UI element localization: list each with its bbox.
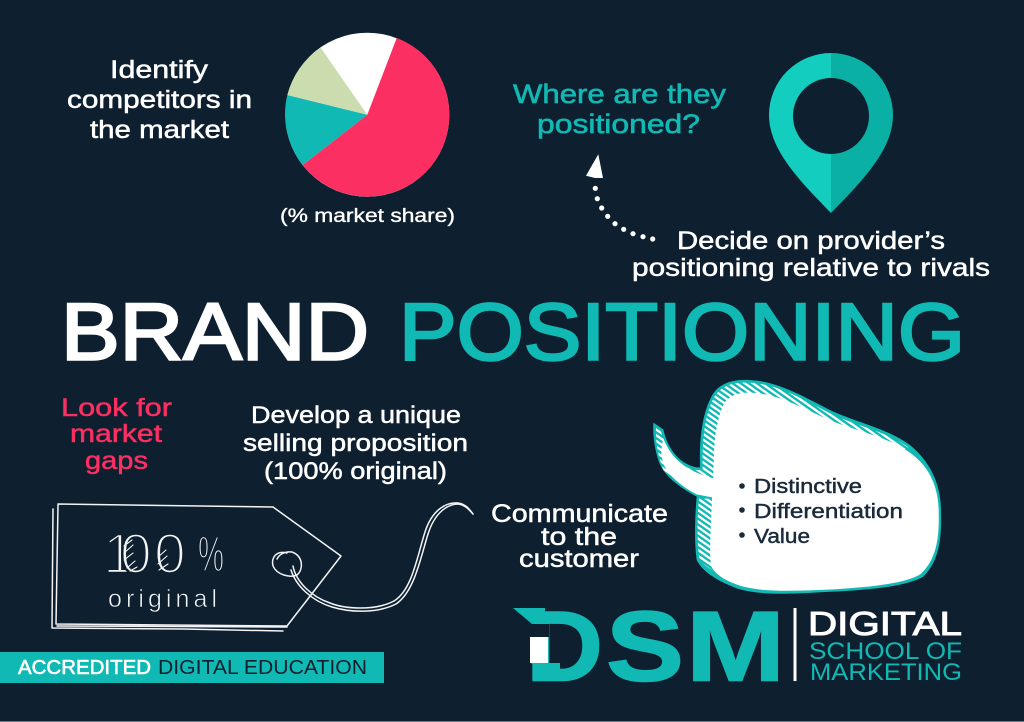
logo mark: DSM: D [526,590,603,702]
bubble list: Differentiation [754,501,903,523]
badge: accredited digital education: DIGITAL EDUCATION [158,657,367,679]
text: communicate to the customer: customer [519,545,639,573]
logo: digital school of marketing [513,590,962,702]
logo mark: DSM [513,590,785,702]
heading: identify competitors: the market [90,116,229,144]
badge: accredited digital education: ACCREDITED [18,657,151,679]
bubble list [739,476,903,548]
logo wordmark: SCHOOL OF [809,638,962,665]
heading: identify competitors [67,56,252,144]
badge: accredited digital education [0,652,384,683]
heading: where are they positioned: Where are they [513,79,727,109]
text: decide on positioning: Decide on provider’s [677,227,945,255]
tag label: original: original [108,585,217,613]
illustration: hand-drawn price tag [52,503,473,631]
text: develop unique selling proposition: selling proposition [243,430,468,457]
heading: where are they positioned [513,79,727,139]
text: develop unique selling proposition [243,402,468,485]
text: look for market gaps: market [70,420,162,448]
logo wordmark: DIGITAL [808,605,962,642]
text: look for market gaps: Look for [61,394,172,422]
tag label: 100 percent [103,522,224,586]
text: communicate to the customer: Communicate [491,500,668,528]
speech bubble [653,380,941,594]
tag label: 100 percent: 100 [103,522,186,586]
pie caption: (% market share) [280,206,455,227]
text: communicate to the customer [491,500,668,573]
digit hatching [124,540,168,571]
panel: identify competitors [67,33,455,227]
heading: where are they positioned: positioned? [537,109,700,139]
arrow: dotted curve to heading [586,154,655,242]
tag label: 100 percent: % [198,526,224,582]
text: develop unique selling proposition: (100% original) [264,458,447,485]
bubble list: Distinctive [754,476,862,498]
bubble list: Value [754,526,810,548]
icon: location pin [769,53,893,213]
text: decide on positioning [632,227,990,282]
title: brand positioning: BRAND [61,288,369,378]
text: communicate to the customer: to the [541,523,617,551]
logo mark: DSM: S [606,590,684,702]
title: brand positioning: POSITIONING [399,288,965,378]
text: look for market gaps: gaps [85,447,148,475]
tag eyelet and string [273,503,473,611]
heading: identify competitors: competitors in [67,86,252,114]
logo wordmark [808,605,962,686]
text: decide on positioning: positioning relative to rivals [632,254,990,282]
title: brand positioning [61,288,965,378]
heading: identify competitors: Identify [110,56,209,84]
text: look for market gaps [61,394,172,475]
logo mark: DSM: M [686,590,785,702]
pie chart: market share [285,33,449,197]
text: develop unique selling proposition: Develop a unique [251,402,461,429]
logo wordmark: MARKETING [810,659,962,686]
